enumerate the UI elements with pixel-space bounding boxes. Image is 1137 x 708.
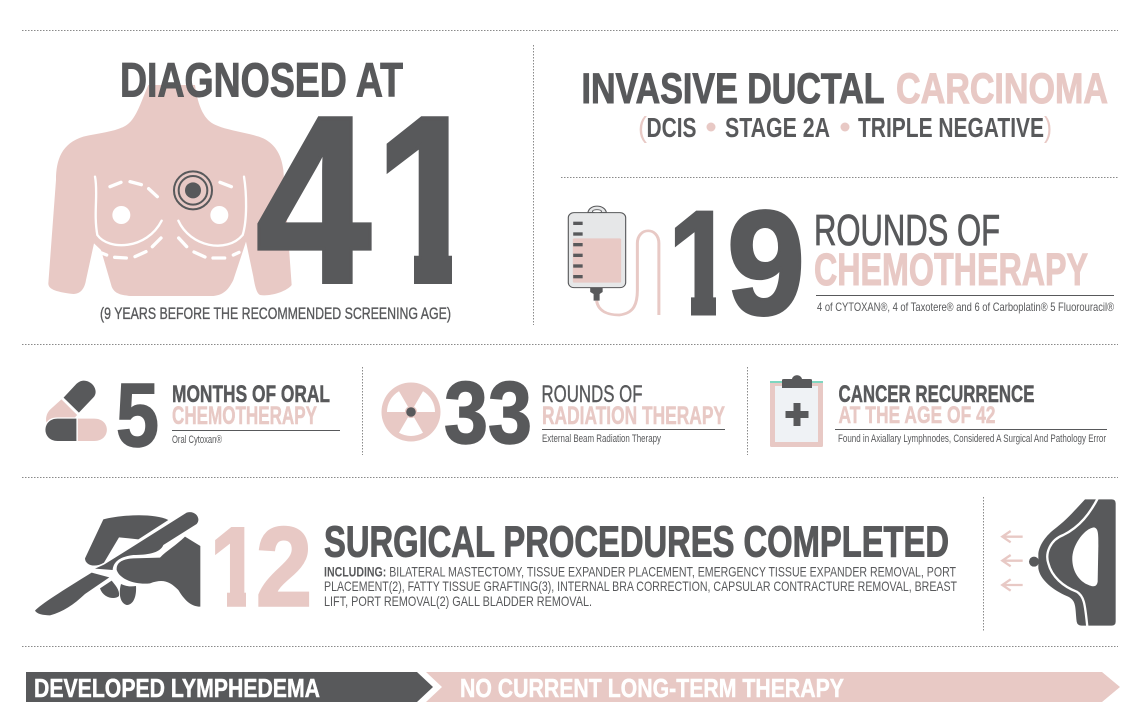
panel: surgical procedures (35, 497, 1116, 630)
heading: rounds of: ROUNDS OF (542, 381, 642, 408)
arrow: no current long-term therapy (426, 672, 1120, 703)
heading: radiation therapy: RADIATION THERAPY (542, 402, 725, 430)
number: 33: 33 (444, 363, 532, 462)
icon: breast implant with arrows (1002, 497, 1116, 627)
arrow: developed lymphedema: DEVELOPED LYMPHEDEMA (34, 673, 320, 703)
panel: chemotherapy rounds (568, 206, 1114, 317)
note: screening age: (9 YEARS BEFORE THE RECOMMENDED SCREENING AGE) (100, 304, 451, 323)
number: 19: 1 (668, 181, 734, 346)
subtitle: DCIS, stage, triple negative: ( (638, 112, 647, 144)
subtitle: DCIS, stage, triple negative: DCIS (646, 112, 696, 143)
icon: torso with tumour target (48, 85, 292, 296)
text: list of procedures: PLACEMENT(2), FATTY TISSUE GRAFTING(3), INTERNAL BRA CORRECTION, CAPSULAR CONTRACTURE REMOVAL, BREAST (324, 578, 957, 594)
heading: invasive ductal carcinoma: INVASIVE DUCTAL (582, 65, 884, 113)
caption: oral cytoxan: Oral Cytoxan® (172, 434, 222, 446)
icon: IV bag (568, 206, 659, 315)
number: 5: 5 (116, 366, 159, 466)
heading: cancer recurrence: CANCER RECURRENCE (838, 381, 1034, 408)
icon: hand with scalpel (35, 512, 200, 615)
caption: external beam: External Beam Radiation Therapy (542, 433, 661, 445)
number: 12: 2 (256, 504, 312, 630)
text: list of procedures (324, 564, 957, 609)
number: 41: 1 (375, 68, 483, 333)
heading: rounds of: ROUNDS OF (814, 206, 1000, 255)
heading: months of oral: MONTHS OF ORAL (172, 381, 330, 408)
icon: clipboard (770, 375, 823, 447)
number: 12: 1 (210, 504, 260, 630)
icon: pills (45, 381, 107, 441)
arrow: no current long-term therapy: NO CURRENT LONG-TERM THERAPY (460, 673, 844, 703)
number: 41: 4 (256, 68, 371, 333)
panel: radiation therapy (382, 363, 725, 462)
heading: chemotherapy: CHEMOTHERAPY (172, 402, 317, 430)
text: list of procedures: LIFT, PORT REMOVAL(2) GALL BLADDER REMOVAL. (324, 593, 592, 609)
panel: cancer type (582, 65, 1108, 144)
icon: radiation symbol (382, 382, 440, 442)
subtitle: DCIS, stage, triple negative: TRIPLE NEGATIVE (858, 112, 1044, 143)
heading: diagnosed at: DIAGNOSED AT (120, 54, 403, 108)
number: 19 (674, 209, 802, 317)
panel: diagnosis (48, 62, 452, 323)
subtitle: DCIS, stage, triple negative (638, 112, 1052, 144)
banner: lymphedema and therapy (26, 672, 1120, 703)
panel: oral chemotherapy (45, 366, 340, 466)
panel: cancer recurrence (770, 375, 1107, 447)
number: 41 (257, 116, 452, 284)
text: list of procedures: INCLUDING: BILATERAL MASTECTOMY, TISSUE EXPANDER PLACEMENT, EMERGENCY TISSUE EXPANDER REMOVAL, PORT (324, 564, 956, 580)
heading: at the age of 42: AT THE AGE OF 42 (838, 402, 996, 429)
subtitle: DCIS, stage, triple negative: ) (1044, 112, 1052, 144)
subtitle: DCIS, stage, triple negative: STAGE 2A (725, 112, 830, 143)
number: 19: 9 (727, 181, 805, 346)
number: 12 (215, 526, 310, 607)
